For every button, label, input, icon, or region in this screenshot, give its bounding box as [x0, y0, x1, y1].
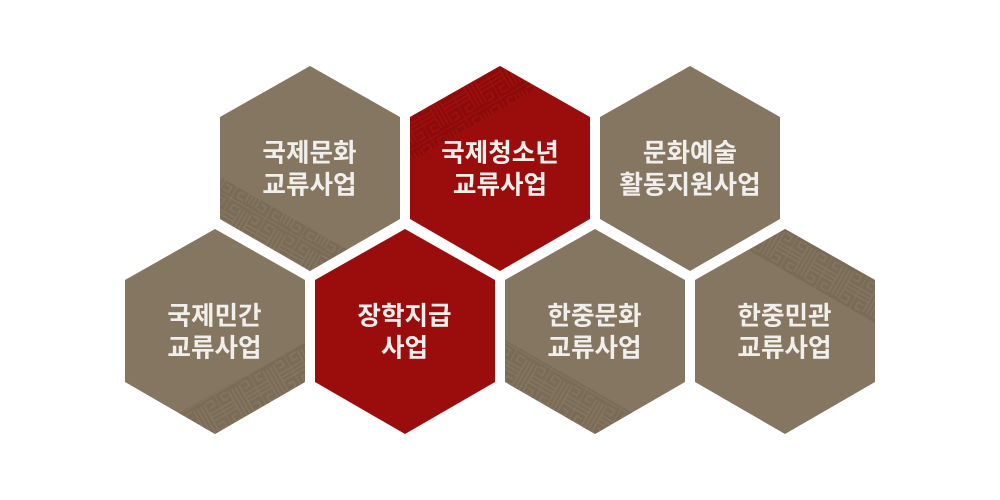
hexagon: 한중민관 교류사업: 한중민관: [737, 302, 832, 330]
hexagon: 국제민간 교류사업: 교류사업: [167, 334, 262, 362]
hexagon: 국제청소년 교류사업: 교류사업: [453, 170, 547, 200]
hexagon: 한중민관 교류사업: 교류사업: [737, 334, 832, 362]
hexagon: 장학지급 사업: 장학지급: [357, 302, 452, 330]
hexagon: 문화예술 활동지원사업: 문화예술: [643, 138, 737, 168]
hexagon: 한중문화 교류사업: [505, 229, 685, 434]
hexagon: 장학지급 사업: 사업: [381, 334, 428, 362]
hexagon: 국제문화 교류사업: [220, 66, 400, 271]
hexagon: 문화예술 활동지원사업: 활동지원사업: [619, 170, 761, 200]
hexagon: 한중문화 교류사업: 교류사업: [547, 334, 642, 362]
hexagon: 국제민간 교류사업: [125, 229, 305, 434]
hexagon: 국제문화 교류사업: 교류사업: [262, 170, 357, 200]
hexagon: 국제민간 교류사업: 국제민간: [167, 302, 262, 330]
hexagon: 국제청소년 교류사업: [410, 66, 590, 271]
hexagon: 한중문화 교류사업: 한중문화: [547, 302, 642, 330]
hexagon: 한중민관 교류사업: [695, 229, 875, 434]
hexagon: 국제청소년 교류사업: 국제청소년: [441, 138, 559, 168]
hexagon: 장학지급 사업: [315, 229, 495, 434]
hexagon: 문화예술 활동지원사업: [600, 66, 780, 271]
hexagon: 국제문화 교류사업: 국제문화: [262, 138, 357, 168]
